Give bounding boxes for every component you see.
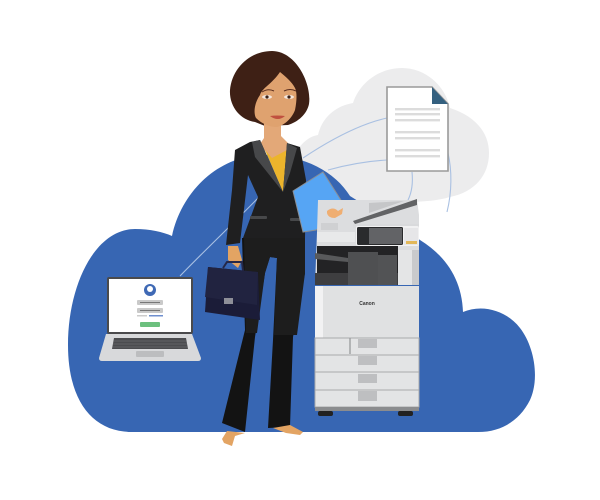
login button [140, 322, 160, 327]
yellow top [265, 150, 287, 192]
output tray area [317, 246, 398, 285]
pockets [250, 216, 267, 219]
woman [205, 51, 309, 446]
laptop [99, 277, 201, 361]
right foot [273, 425, 303, 435]
network lines [180, 118, 451, 276]
login fields [137, 300, 163, 305]
jacket [226, 140, 306, 245]
brand name: Canon [359, 301, 375, 307]
trousers [222, 238, 305, 432]
eyebrows [262, 90, 296, 92]
folder [293, 172, 346, 232]
lips [270, 116, 285, 119]
briefcase [205, 262, 260, 320]
login avatar [144, 284, 156, 296]
trouser upper legs [244, 238, 305, 335]
paper drawers [315, 338, 419, 407]
hand [228, 246, 242, 268]
left foot [222, 431, 245, 446]
background cloud: grey [296, 68, 489, 202]
printer touch screen [356, 226, 419, 246]
printer [315, 199, 419, 416]
eyes [262, 95, 272, 99]
foreground cloud: blue [68, 155, 535, 432]
document [387, 87, 448, 171]
neck [260, 122, 288, 160]
hair [230, 51, 309, 126]
face [255, 72, 296, 127]
lapels [252, 140, 283, 192]
main body [315, 286, 419, 338]
wheels [318, 411, 333, 416]
